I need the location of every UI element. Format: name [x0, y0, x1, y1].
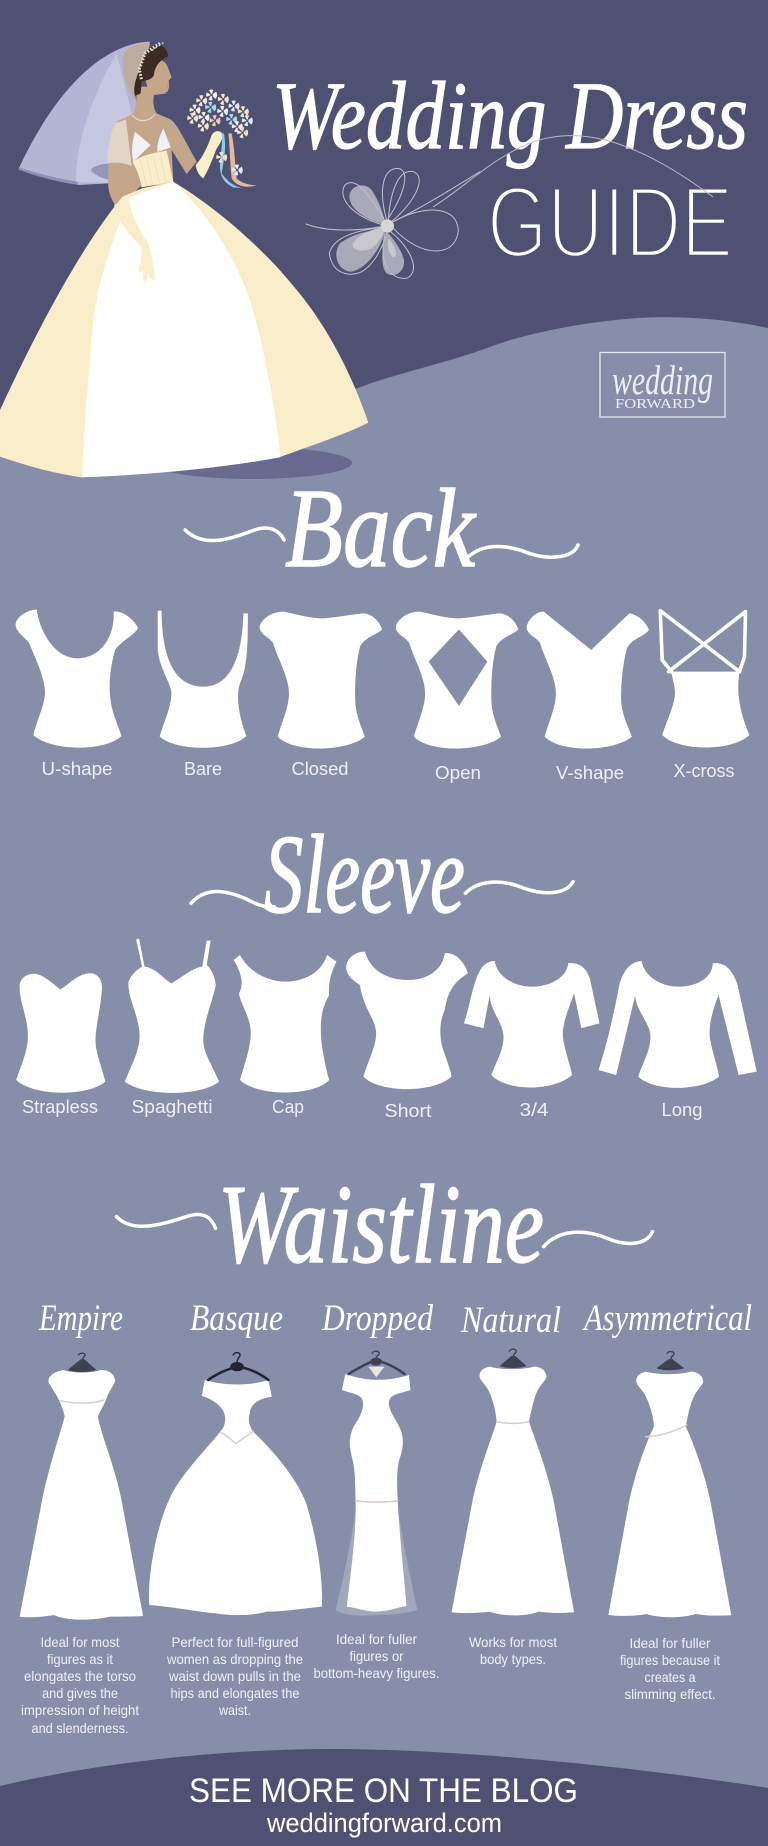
top: Strapless [16, 973, 105, 1093]
glove arm on skirt [114, 131, 223, 282]
heading: Waistline: Waistline [218, 1163, 544, 1287]
panel: sleeve styles [16, 813, 757, 1121]
panel: back styles [16, 467, 749, 783]
description: Dropped: figures or [350, 1648, 404, 1664]
raised glove [196, 131, 223, 178]
description: Asymmetrical: creates a [644, 1669, 696, 1685]
top: 3/4 [464, 961, 600, 1087]
top: Cap [234, 955, 336, 1092]
description: Empire [21, 1634, 139, 1736]
description: Natural: Works for most [469, 1634, 557, 1650]
description: Basque: waist down pulls in the [168, 1668, 301, 1684]
description: Asymmetrical: slimming effect. [624, 1686, 716, 1702]
description: Dropped [314, 1631, 440, 1681]
label: Basque: Basque [190, 1298, 283, 1339]
illustration: bride [0, 42, 368, 479]
label: Closed: Closed [292, 758, 348, 779]
dress: Dropped [336, 1351, 417, 1616]
footer band [0, 1749, 768, 1846]
lips [167, 84, 170, 88]
flower thread through title [433, 136, 713, 207]
description: Empire: Ideal for most [40, 1634, 120, 1650]
heading: Back: Back [285, 467, 477, 591]
description: Asymmetrical: figures because it [620, 1652, 720, 1668]
description: Basque: hips and elongates the [170, 1685, 300, 1701]
description: Basque: women as dropping the [166, 1651, 303, 1667]
top: Closed [260, 612, 382, 749]
back garments [16, 609, 749, 749]
necklace [132, 114, 155, 121]
logo: Wedding Forward: wedding [612, 357, 713, 403]
description: Dropped: Ideal for fuller [336, 1631, 417, 1647]
label: Cap: Cap [272, 1096, 304, 1117]
skirt cream layer [0, 182, 368, 477]
label: Short: Short [384, 1100, 432, 1121]
neck and torso skin [108, 87, 197, 205]
description: Asymmetrical: Ideal for fuller [630, 1635, 711, 1651]
description: Empire: and gives the [42, 1685, 118, 1701]
dress: Empire [20, 1353, 143, 1620]
top: X-cross [660, 611, 749, 747]
panel: waistline styles [20, 1163, 752, 1736]
bride upper body [108, 43, 197, 205]
label: 3/4: 3/4 [520, 1099, 548, 1120]
dress: Asymmetrical [608, 1351, 731, 1617]
label: X-cross: X-cross [674, 760, 734, 781]
top: Spaghetti [125, 939, 219, 1093]
top: Bare [158, 611, 248, 748]
heading: Sleeve: Sleeve [264, 813, 465, 937]
description: Dropped: bottom-heavy figures. [314, 1665, 440, 1681]
description: Basque: Perfect for full-figured [172, 1634, 298, 1650]
hair [134, 45, 168, 96]
logo: Wedding Forward [600, 352, 725, 417]
corset [133, 151, 173, 187]
white bodice [132, 132, 151, 162]
footer url: weddingforward.com [266, 1808, 502, 1838]
label: Dropped: Dropped [321, 1298, 433, 1339]
footer heading: SEE MORE ON THE BLOG [189, 1772, 578, 1810]
dress: Basque [149, 1353, 322, 1615]
veil [18, 42, 150, 185]
top: Short [346, 952, 468, 1089]
label: Bare: Bare [184, 758, 222, 779]
face [145, 60, 172, 93]
label: Empire: Empire [38, 1298, 123, 1339]
top: Open [396, 612, 518, 749]
bouquet [189, 92, 257, 188]
heading: Back [185, 467, 578, 591]
description: Basque: waist. [218, 1702, 251, 1718]
label: Long: Long [662, 1099, 702, 1120]
label: Strapless: Strapless [22, 1096, 98, 1117]
description: Natural: body types. [480, 1651, 546, 1667]
tiara [139, 43, 160, 81]
description: Basque [166, 1634, 303, 1718]
dress shadow on floor [152, 447, 352, 479]
icon: line flower [306, 168, 480, 278]
sleeve garments [16, 939, 757, 1093]
header dark wave background [0, 0, 768, 450]
sheer sleeve [108, 119, 132, 166]
top: Long [599, 961, 757, 1088]
label: U-shape: U-shape [42, 758, 112, 779]
bouquet flowers [189, 92, 251, 173]
description: Natural [469, 1634, 557, 1667]
dress: Natural [452, 1349, 574, 1615]
logo: Wedding Forward: FORWARD [615, 397, 695, 412]
top: V-shape [527, 612, 649, 749]
label: Spaghetti: Spaghetti [132, 1096, 212, 1117]
skirt white panel [82, 182, 280, 477]
description: Empire: elongates the torso [24, 1668, 136, 1684]
dresses group [20, 1349, 731, 1620]
label: Open: Open [435, 762, 481, 783]
description: Empire: impression of height [21, 1702, 139, 1718]
description: Empire: and slenderness. [32, 1720, 128, 1736]
top: U-shape [16, 609, 138, 748]
description: Empire: figures as it [47, 1651, 113, 1667]
label: V-shape: V-shape [556, 762, 624, 783]
description: Asymmetrical [620, 1635, 720, 1702]
label: Natural: Natural [460, 1300, 561, 1341]
